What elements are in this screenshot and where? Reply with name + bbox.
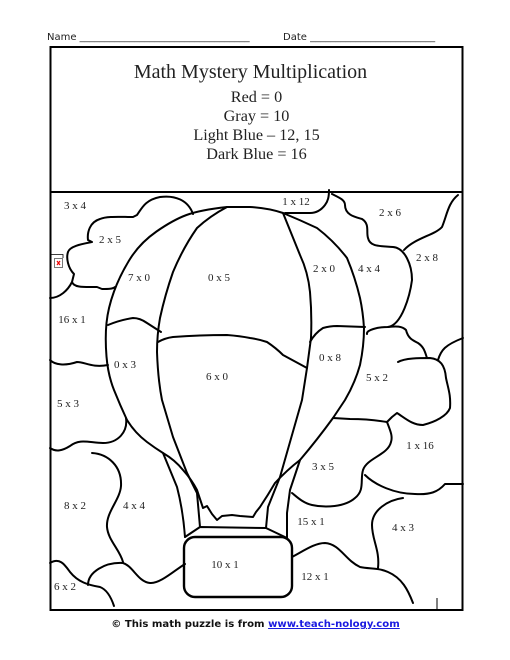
multiplication labels: 2 x 0 — [313, 263, 336, 275]
balloon inner panel seams — [108, 207, 365, 538]
multiplication labels: 3 x 4 — [64, 200, 86, 212]
background region lines — [50, 190, 463, 610]
multiplication labels: 1 x 12 — [282, 196, 310, 208]
multiplication labels: 12 x 1 — [301, 571, 329, 583]
multiplication labels: 16 x 1 — [58, 314, 86, 326]
multiplication labels: 6 x 0 — [206, 371, 228, 383]
multiplication labels: 7 x 0 — [128, 272, 150, 284]
multiplication labels: 4 x 4 — [123, 500, 146, 512]
multiplication labels: 0 x 5 — [208, 272, 230, 284]
colour key: Dark Blue = 16 — [206, 145, 307, 163]
multiplication labels: 2 x 5 — [99, 234, 122, 246]
multiplication labels: 0 x 8 — [319, 352, 342, 364]
multiplication labels: 8 x 2 — [64, 500, 86, 512]
name and date line — [47, 32, 436, 43]
colour key — [193, 88, 320, 163]
multiplication labels: 2 x 8 — [416, 252, 438, 264]
multiplication labels: 2 x 6 — [379, 207, 402, 219]
colour key: Gray = 10 — [224, 107, 289, 125]
basket ropes — [185, 527, 287, 538]
left cloud — [50, 197, 193, 298]
icon: broken image placeholder — [50, 254, 63, 268]
heading: Math Mystery Multiplication — [134, 61, 367, 83]
multiplication labels — [54, 196, 438, 593]
multiplication labels: 10 x 1 — [211, 559, 239, 571]
multiplication labels: 5 x 2 — [366, 372, 388, 384]
multiplication labels: 1 x 16 — [406, 440, 434, 452]
basket — [184, 537, 292, 597]
panel: legend header — [50, 47, 462, 192]
multiplication labels: 6 x 2 — [54, 581, 76, 593]
balloon envelope outline — [106, 207, 364, 520]
colour key: Light Blue – 12, 15 — [193, 126, 320, 144]
multiplication labels: 15 x 1 — [297, 516, 325, 528]
multiplication labels: 4 x 3 — [392, 522, 414, 534]
name and date line: Date _________________________ — [283, 32, 436, 43]
multiplication labels: 4 x 4 — [358, 263, 380, 275]
footer credit: © This math puzzle is from www.teach-nology.com — [111, 619, 400, 630]
multiplication labels: 3 x 5 — [312, 461, 334, 473]
multiplication labels: 5 x 3 — [57, 398, 80, 410]
multiplication labels: 0 x 3 — [114, 359, 136, 371]
right cloud — [333, 326, 450, 425]
colour key: Red = 0 — [231, 88, 282, 106]
panel: colouring puzzle — [50, 190, 463, 610]
name and date line: Name __________________________________ — [47, 32, 251, 43]
